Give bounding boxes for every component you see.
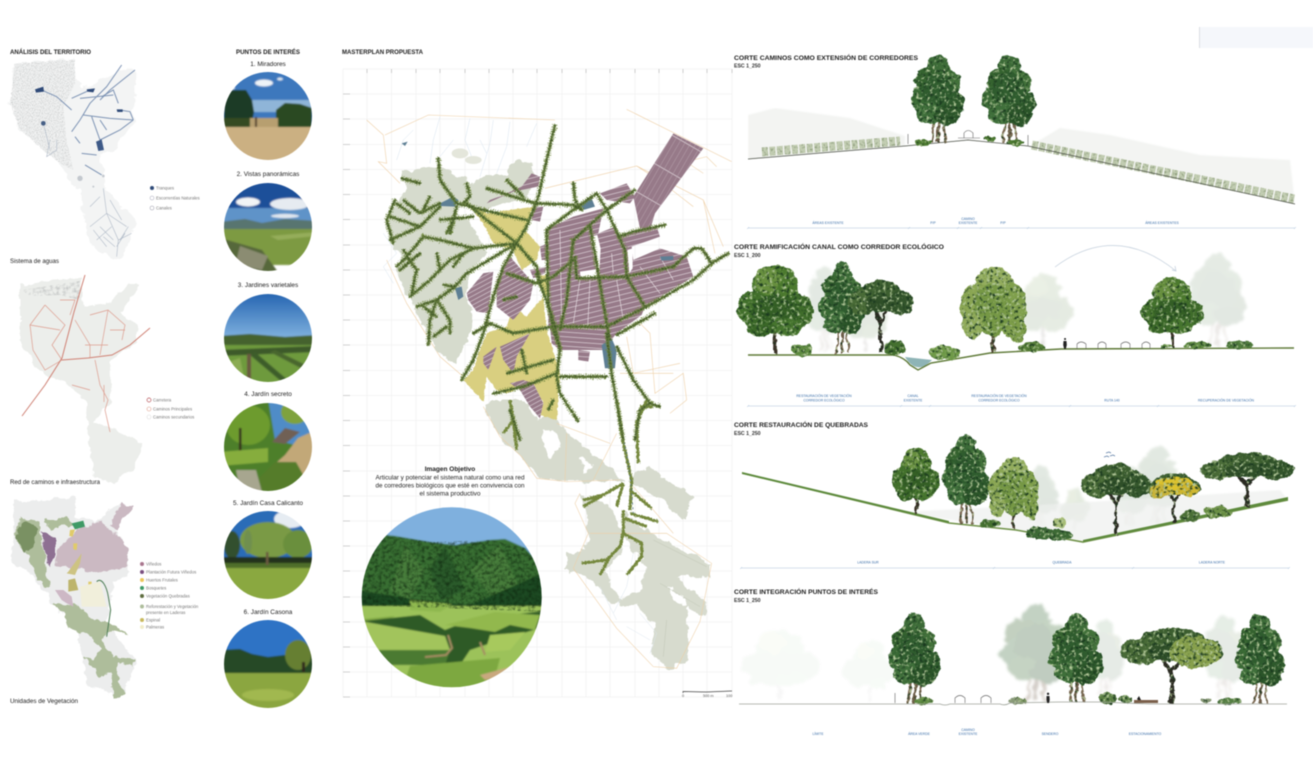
path arches [1077, 342, 1150, 349]
fence post [894, 693, 896, 703]
water [905, 357, 932, 367]
label: jardín casona: 6. Jardín Casona [244, 609, 293, 616]
heading: corte caminos: CORTE CAMINOS COMO EXTENSIÓN DE CORREDORES [734, 53, 919, 62]
dimension line: RUTA 140 [1104, 398, 1120, 402]
scale label: ESC 1_250 [734, 64, 761, 70]
scale label: ESC 1_250 [734, 431, 761, 437]
trees [888, 614, 1285, 704]
legend: sistema de aguas: Tranques [156, 186, 174, 190]
heading: corte restauración: CORTE RESTAURACIÓN DE QUEBRADAS [734, 420, 869, 429]
scale label: ESC 1_200 [734, 253, 761, 259]
heading: masterplan propuesta: MASTERPLAN PROPUESTA [342, 49, 423, 56]
path arches [955, 696, 991, 703]
label: jardín secreto: 4. Jardín secreto [244, 391, 292, 398]
map: sistema de aguas [10, 59, 137, 260]
text: imagen objetivo: Imagen Objetivo [425, 466, 475, 473]
panel: corte restauración [734, 420, 1294, 569]
text: imagen objetivo: Articular y potenciar el sistema natural como una red [376, 474, 525, 482]
caption: sistema de aguas: Sistema de aguas [10, 258, 60, 265]
dimension line: CORREDOR ECOLÓGICO [978, 398, 1020, 402]
bench with person [1134, 696, 1158, 703]
section labels: LÍMITE [813, 732, 824, 736]
scale bar: 100 [726, 694, 732, 698]
ground slope [742, 473, 1288, 542]
legend: unidades de vegetación: Viñedos [146, 562, 161, 566]
section labels: ESTACIONAMIENTO [1129, 732, 1162, 736]
birds [1104, 452, 1115, 457]
dimension line: LADERA NORTE [1199, 560, 1226, 564]
haze [900, 490, 1288, 542]
dimension line: CAMINO [961, 217, 975, 221]
photo: miradores [223, 71, 313, 161]
legend: unidades de vegetación: Bosquetes [146, 586, 166, 590]
photo: imagen objetivo [360, 506, 542, 688]
label: vistas panorámicas: 2. Vistas panorámicas [237, 171, 299, 178]
photo: vistas panorámicas [220, 179, 316, 272]
dimension line: EXISTENTE [904, 398, 923, 402]
text: imagen objetivo: el sistema productivo [419, 490, 481, 498]
section labels: SENDERO [1042, 732, 1059, 736]
panel: corte ramificación [734, 242, 1296, 407]
section labels: EXISTENTE [959, 732, 978, 736]
fence posts [908, 134, 1028, 146]
photo: jardín secreto [223, 402, 313, 492]
panel: masterplan propuesta [342, 49, 732, 698]
top right faint panel [1199, 27, 1313, 48]
map: red de caminos [20, 275, 150, 483]
scale bar: 500 m [703, 694, 714, 698]
legend: unidades de vegetación: Huertos Frutales [146, 578, 178, 582]
dimension line: LADERA SUR [857, 560, 879, 564]
scale label: ESC 1_250 [734, 598, 761, 604]
panel: corte integración [734, 587, 1287, 736]
dimension line: RESTAURACIÓN DE VEGETACIÓN [971, 393, 1027, 398]
section labels: CAMINO [961, 728, 975, 732]
legend: sistema de aguas [150, 186, 200, 210]
legend: unidades de vegetación: Plantación Futura Viñedos [146, 570, 196, 574]
photo: jardín casa calicanto [223, 510, 313, 600]
vineyards main mass [548, 208, 693, 350]
caption: unidades de vegetación: Unidades de Vegetación [10, 698, 78, 705]
legend: unidades de vegetación: Palmeras [146, 624, 164, 630]
panel: análisis del territorio [10, 47, 200, 705]
vine rows [748, 692, 888, 704]
ground line [748, 140, 1295, 204]
dimension line: RECUPERACIÓN DE VEGETACIÓN [1198, 398, 1254, 402]
legend: red de caminos [147, 398, 194, 420]
legend: unidades de vegetación: presente en Laderas [146, 610, 185, 615]
trees [737, 262, 1255, 360]
map: unidades de vegetación [10, 497, 137, 698]
dimension line: P/P [930, 221, 936, 225]
dimension line: ÁREAS EXISTENTE [812, 221, 844, 225]
ghost trees [1022, 447, 1181, 530]
heading: análisis del territorio: ANÁLISIS DEL TERRITORIO [10, 47, 91, 56]
section labels [813, 728, 1162, 736]
legend: unidades de vegetación: Vegetación Quebradas [146, 594, 190, 598]
scale bar: 0 [682, 694, 684, 698]
trees [892, 434, 1294, 541]
photo: jardín casona [223, 619, 313, 709]
legend: red de caminos: Caminos Principales [153, 406, 192, 412]
section labels: ÁREA VERDE [908, 732, 931, 736]
label: jardín casa calicanto: 5. Jardín Casa Calicanto [233, 500, 303, 507]
trees [911, 55, 1036, 146]
dimension line [747, 393, 1296, 407]
heading: puntos de interés: PUNTOS DE INTERÉS [236, 47, 301, 56]
lower basin [483, 400, 712, 670]
ghost trees [805, 254, 1247, 350]
person [1063, 338, 1067, 349]
background hills [748, 108, 1295, 204]
legend: red de caminos: Carretera [153, 398, 172, 402]
ground [748, 348, 1294, 370]
legend: unidades de vegetación: Espinal [146, 618, 160, 622]
road arch [958, 130, 980, 138]
legend: unidades de vegetación [140, 562, 199, 630]
dimension line: EXISTENTE [959, 221, 978, 225]
dimension line: RESTAURACIÓN DE VEGETACIÓN [796, 393, 852, 398]
legend: red de caminos: Caminos secundarios [153, 414, 194, 420]
dimension line [740, 560, 1290, 569]
dimension line [747, 217, 1296, 229]
label: miradores: 1. Miradores [250, 61, 286, 68]
panel: puntos de interés [220, 47, 316, 713]
label: jardines varietales: 3. Jardines varietales [238, 282, 298, 289]
dimension line: CORREDOR ECOLÓGICO [803, 398, 845, 402]
legend: sistema de aguas: Escorrentías Naturales [156, 196, 200, 200]
vine rows [762, 141, 1294, 199]
dimension line: P/P [1000, 221, 1006, 225]
photo: jardines varietales [223, 293, 313, 383]
dimension line: ÁREAS EXISTENTES [1145, 221, 1180, 225]
panel: corte caminos [734, 53, 1296, 229]
heading: corte integración: CORTE INTEGRACIÓN PUNTOS DE INTERÉS [734, 587, 879, 596]
map: masterplan [367, 109, 732, 670]
dimension line: CANAL [907, 394, 919, 398]
arc arrow [1055, 245, 1176, 271]
legend: sistema de aguas: Canales [156, 206, 172, 210]
legend: unidades de vegetación: Reforestación y Vegetación [146, 604, 199, 609]
text: imagen objetivo: de corredores biológicos que esté en convivencia con [376, 482, 525, 490]
person [1046, 693, 1050, 703]
caption: red de caminos: Red de caminos e infraestructura [10, 479, 100, 486]
ghost trees [740, 604, 1248, 702]
heading: corte ramificación: CORTE RAMIFICACIÓN CANAL COMO CORREDOR ECOLÓGICO [734, 242, 944, 251]
ground [739, 702, 1287, 705]
upper plan [367, 109, 732, 440]
text: imagen objetivo [376, 466, 525, 498]
scale bar [682, 691, 732, 698]
dimension line: QUEBRADA [1052, 560, 1072, 564]
